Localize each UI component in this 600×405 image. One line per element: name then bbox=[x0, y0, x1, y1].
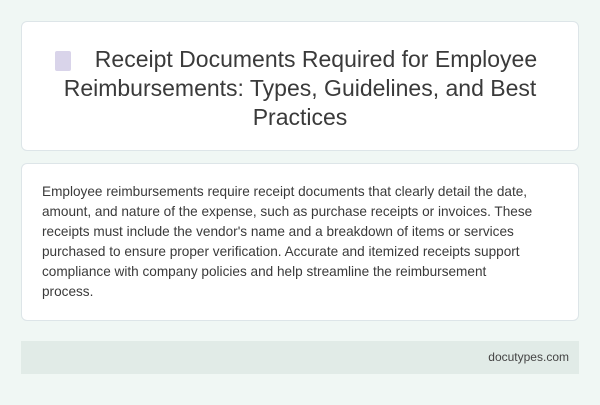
footer bbox=[21, 341, 579, 374]
panel: description bbox=[21, 163, 579, 321]
panel: title bbox=[21, 21, 579, 151]
footer text: docutypes.com bbox=[488, 350, 569, 364]
title: Receipt Documents Required for Employee Reimbursements: Types, Guidelines, and Best Practices bbox=[64, 46, 537, 130]
icon: receipt bbox=[55, 51, 71, 71]
text block: Employee reimbursements require receipt documents that clearly detail the date, amount, and nature of the expense, such as purchase receipts or invoices. These receipts must include the vendor's name and a breakdown of items or services purchased to ensure proper verification. Accurate and itemized receipts support compliance with company policies and help streamline the reimbursement process. bbox=[42, 184, 532, 299]
